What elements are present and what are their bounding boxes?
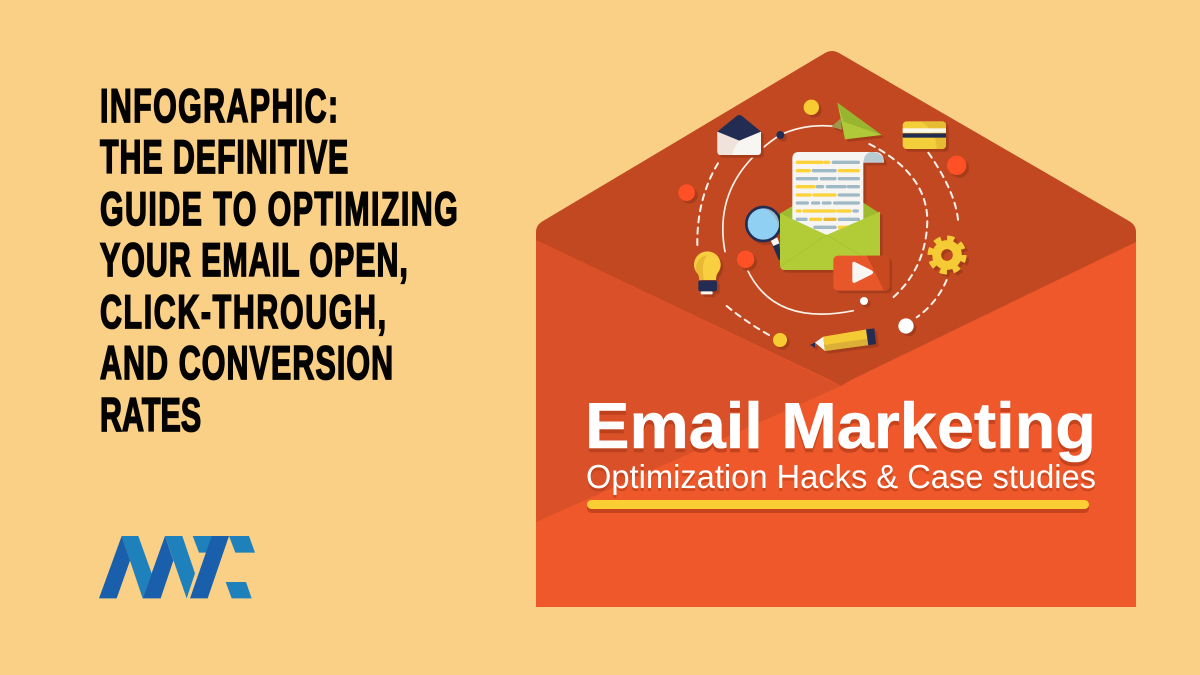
icon: light bulb [694, 251, 721, 294]
subheading: Optimization Hacks & Case studies [586, 458, 1096, 495]
marketing illustration [678, 100, 966, 351]
title: INFOGRAPHIC: [100, 80, 338, 133]
envelope front [780, 212, 880, 270]
dots [678, 100, 966, 347]
envelope top flap [536, 51, 1136, 386]
envelope body [536, 235, 1136, 607]
orbit lines [697, 126, 958, 337]
icon: pencil [810, 328, 876, 351]
title: CLICK-THROUGH, [100, 286, 386, 339]
letter curl [863, 152, 884, 163]
icon: magnifying glass [746, 207, 782, 260]
icon: open green envelope with letter [780, 152, 884, 270]
headline: Email Marketing: Email Marketing [585, 389, 1096, 462]
icon: video play [833, 256, 889, 291]
letter sheet [792, 152, 884, 237]
envelope [536, 51, 1136, 607]
title: AND CONVERSION [100, 337, 393, 390]
envelope back [780, 202, 880, 237]
yellow underline [587, 500, 1089, 509]
title: YOUR EMAIL OPEN, [100, 234, 408, 287]
title [100, 80, 458, 442]
envelope left fold [536, 240, 841, 522]
title: THE DEFINITIVE [100, 131, 348, 184]
icon: gear [930, 238, 964, 272]
logo [99, 536, 255, 598]
icon: small envelope [717, 115, 761, 155]
icon: credit card [903, 121, 946, 149]
title: RATES [100, 389, 201, 442]
icon: paper plane [832, 103, 882, 139]
title: GUIDE TO OPTIMIZING [100, 183, 458, 236]
letter text lines [797, 162, 858, 227]
